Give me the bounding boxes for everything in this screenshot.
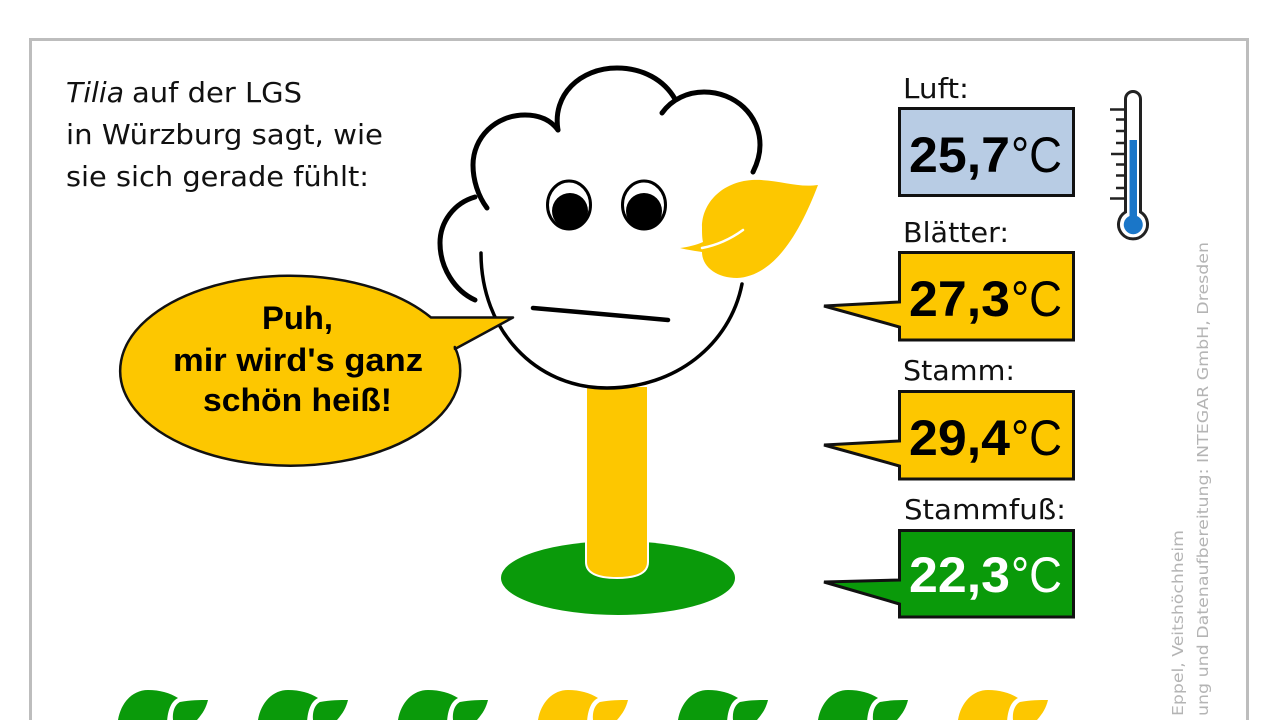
intro text: Tilia — [66, 76, 124, 109]
reading: trunk base temperature: 22,3 — [909, 547, 1010, 603]
credits (rotated) — [1169, 242, 1212, 716]
reading: trunk temperature: 29,4 — [909, 410, 1010, 466]
credits (rotated): ung und Datenaufbereitung: INTEGAR GmbH, Dresden — [1194, 242, 1212, 716]
icon: yellow leaf 7 — [958, 690, 1048, 720]
speech bubble: mir wird's ganz — [173, 342, 423, 378]
intro text — [66, 76, 383, 193]
intro text: sie sich gerade fühlt: — [66, 160, 369, 193]
illustration: tree face — [533, 181, 668, 320]
illustration: tree trunk and ground — [501, 386, 735, 615]
credits (rotated): Eppel, Veitshöchheim — [1169, 530, 1187, 716]
reading: leaf temperature — [824, 216, 1074, 340]
icon: green leaf 5 — [678, 690, 768, 720]
reading: trunk temperature — [824, 354, 1074, 479]
intro text: auf der LGS — [132, 76, 302, 109]
icon: right eye — [622, 181, 666, 229]
reading: air temperature — [900, 72, 1074, 196]
icon: yellow leaf — [680, 180, 818, 278]
icon: thermometer — [1110, 92, 1148, 239]
reading: air temperature: °C — [1011, 127, 1062, 183]
icon: green leaf 1 — [118, 690, 208, 720]
reading: trunk temperature: Stamm: — [903, 354, 1015, 387]
icon: green leaf 3 — [398, 690, 488, 720]
mouth — [533, 308, 668, 320]
icon: yellow leaf 4 — [538, 690, 628, 720]
status row: leaf icons — [118, 690, 1048, 720]
reading: trunk temperature: °C — [1011, 410, 1062, 466]
reading: trunk base temperature — [824, 493, 1074, 617]
speech bubble: Puh, — [262, 300, 333, 336]
reading: air temperature: Luft: — [903, 72, 969, 105]
reading: leaf temperature: °C — [1011, 271, 1062, 327]
intro text: in Würzburg sagt, wie — [66, 118, 383, 151]
speech bubble — [120, 276, 513, 466]
speech bubble: schön heiß! — [203, 382, 392, 418]
icon: green leaf 2 — [258, 690, 348, 720]
illustration: tree crown outline — [440, 68, 760, 388]
icon: left eye — [548, 181, 590, 229]
reading: leaf temperature: 27,3 — [909, 271, 1010, 327]
icon: green leaf 6 — [818, 690, 908, 720]
reading: leaf temperature: Blätter: — [903, 216, 1009, 249]
reading: trunk base temperature: Stammfuß: — [904, 493, 1066, 526]
reading: trunk base temperature: °C — [1011, 547, 1062, 603]
reading: air temperature: 25,7 — [909, 127, 1010, 183]
